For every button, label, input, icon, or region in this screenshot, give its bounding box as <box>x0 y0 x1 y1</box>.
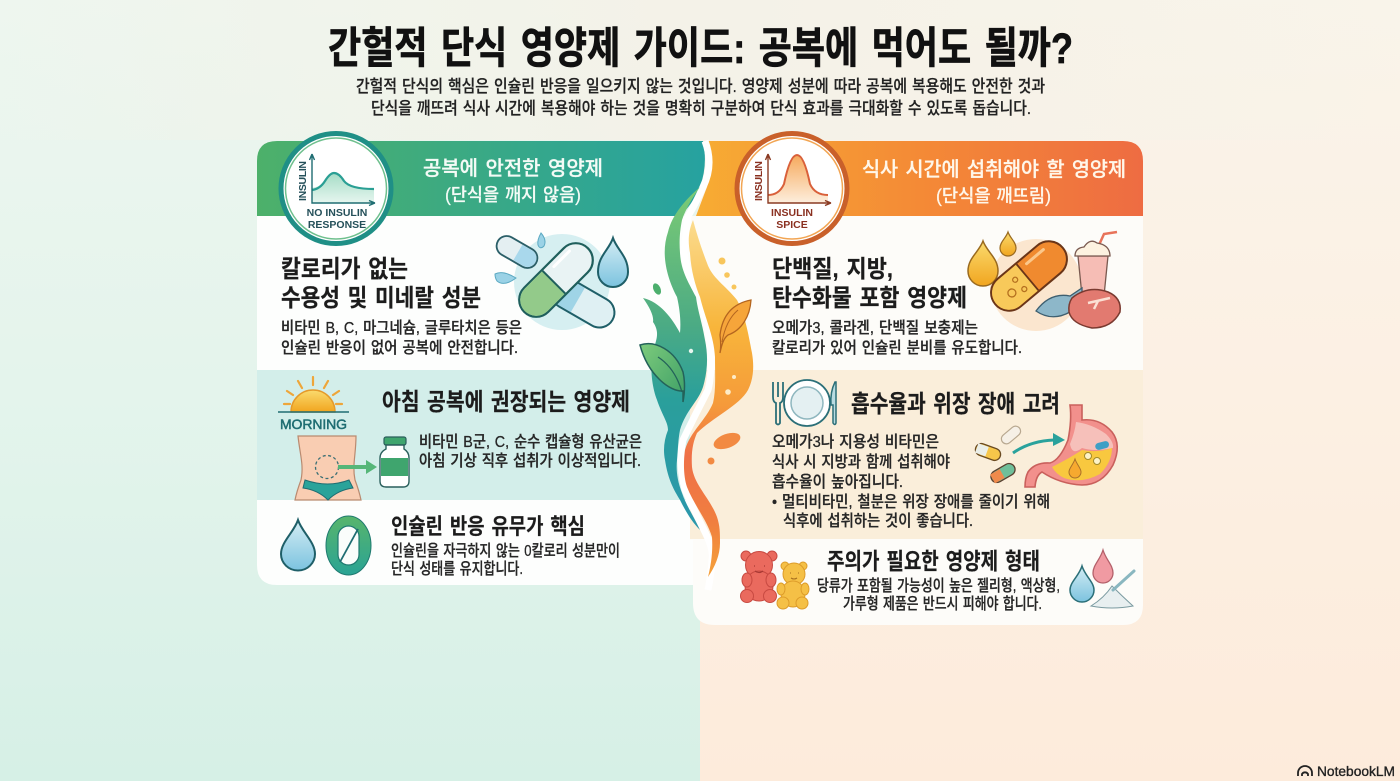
heading: zero-calorie ingredients: 칼로리가 없는 <box>281 256 408 283</box>
icon: liquid drops and powder <box>1070 550 1134 608</box>
panel base: right <box>690 216 1143 625</box>
icon: torso with bottle <box>295 436 409 500</box>
text: zero-calorie body: 인슐린 반응이 없어 공복에 안전합니다. <box>281 339 518 357</box>
icon: stomach and pills <box>974 405 1117 487</box>
text: absorption body <box>772 433 1050 530</box>
dots and splashes <box>651 258 743 464</box>
badge: no insulin response: RESPONSE <box>308 219 366 231</box>
leaf: orange <box>720 300 751 353</box>
text: caution body: 가루형 제품은 반드시 피해야 합니다. <box>843 595 1042 613</box>
text: caution body: 당류가 포함될 가능성이 높은 젤리형, 액상형, <box>817 577 1060 595</box>
text: morning body: 비타민 B군, C, 순수 캡슐형 유산균은 <box>419 433 642 451</box>
header band: meals <box>696 141 1143 216</box>
section heading: insulin response: 인슐린 반응 유무가 핵심 <box>391 514 585 539</box>
text: macronutrients body: 칼로리가 있어 인슐린 분비를 유도합니다. <box>772 339 1022 357</box>
icon: plate and cutlery <box>773 380 836 426</box>
badge: insulin spike: INSULIN <box>753 161 765 201</box>
header text: meals: 식사 시간에 섭취해야 할 영양제 <box>862 158 1126 181</box>
text: insulin body: 단식 성태를 유지합니다. <box>391 560 523 578</box>
badge: insulin spike: SPICE <box>776 219 808 231</box>
subtitle <box>356 77 1045 118</box>
text: macronutrients body: 오메가3, 콜라겐, 단백질 보충제는 <box>772 319 978 337</box>
text: macronutrients body <box>772 319 1022 357</box>
text: morning body <box>419 433 642 470</box>
text: zero-calorie body: 비타민 B, C, 마그네슘, 글루타치은 등은 <box>281 319 522 337</box>
subtitle: 단식을 깨뜨려 식사 시간에 복용해야 하는 것을 명확히 구분하여 단식 효과를 극대화할 수 있도록 돕습니다. <box>371 99 1031 118</box>
icon: morning sun: MORNING <box>280 416 347 432</box>
icon: morning sun <box>278 377 349 432</box>
text: insulin body <box>391 542 620 578</box>
subtitle: 간헐적 단식의 핵심은 인슐린 반응을 일으키지 않는 것입니다. 영양제 성분에 따라 공복에 복용해도 안전한 것과 <box>356 77 1045 96</box>
heading: macronutrients: 탄수화물 포함 영양제 <box>772 285 967 312</box>
panel: take with meals <box>690 134 1143 625</box>
central flame <box>640 141 753 590</box>
text: morning body: 아침 기상 직후 섭취가 이상적입니다. <box>419 452 641 470</box>
badge: no insulin response <box>281 134 391 244</box>
panel: safe on empty stomach <box>257 134 717 585</box>
text: absorption body: 흡수율이 높아집니다. <box>772 473 903 491</box>
heading: macronutrients: 단백질, 지방, <box>772 256 893 283</box>
icon: oil capsule, shake, fish, steak <box>968 232 1120 331</box>
title: 간헐적 단식 영양제 가이드: 공복에 먹어도 될까? <box>328 25 1073 73</box>
text: insulin body: 인슐린을 자극하지 않는 0칼로리 성분만이 <box>391 542 620 560</box>
header text: safe: (단식을 깨지 않음) <box>445 185 581 205</box>
text: absorption body: 식후에 섭취하는 것이 좋습니다. <box>783 512 973 530</box>
icon: gummy bears <box>740 551 809 609</box>
heading: macronutrients <box>772 256 967 312</box>
badge: no insulin response: INSULIN <box>297 161 309 201</box>
text: absorption body: 오메가3나 지용성 비타민은 <box>772 433 939 451</box>
section heading: morning: 아침 공복에 권장되는 영양제 <box>382 389 630 416</box>
section heading: caution: 주의가 필요한 영양제 형태 <box>827 548 1040 574</box>
logo: NotebookLM: NotebookLM <box>1317 764 1395 779</box>
header band: safe <box>257 141 705 216</box>
header text: safe <box>423 157 603 205</box>
header text: meals <box>862 158 1126 206</box>
header text: safe: 공복에 안전한 영양제 <box>423 157 603 180</box>
text: absorption body: • 멀티비타민, 철분은 위장 장애를 줄이기 위해 <box>772 493 1050 511</box>
text: zero-calorie body <box>281 319 522 357</box>
header text: meals: (단식을 깨뜨림) <box>936 186 1051 206</box>
icon: capsules and water <box>493 232 628 333</box>
heading: zero-calorie ingredients <box>281 256 481 312</box>
flame: yellow and orange <box>684 220 753 577</box>
badge: insulin spike: INSULIN <box>771 207 813 219</box>
leaf: green <box>640 344 684 402</box>
badge: insulin spike <box>737 134 847 244</box>
section heading: absorption: 흡수율과 위장 장애 고려 <box>851 391 1060 418</box>
text: absorption body: 식사 시 지방과 함께 섭취해야 <box>772 453 950 471</box>
badge: no insulin response: NO INSULIN <box>307 207 367 219</box>
heading: zero-calorie ingredients: 수용성 및 미네랄 성분 <box>281 285 481 312</box>
text: caution body <box>817 577 1060 613</box>
icon: water drop and zero <box>281 516 371 575</box>
panel base: left <box>257 216 717 585</box>
flame: green and teal <box>643 187 707 530</box>
